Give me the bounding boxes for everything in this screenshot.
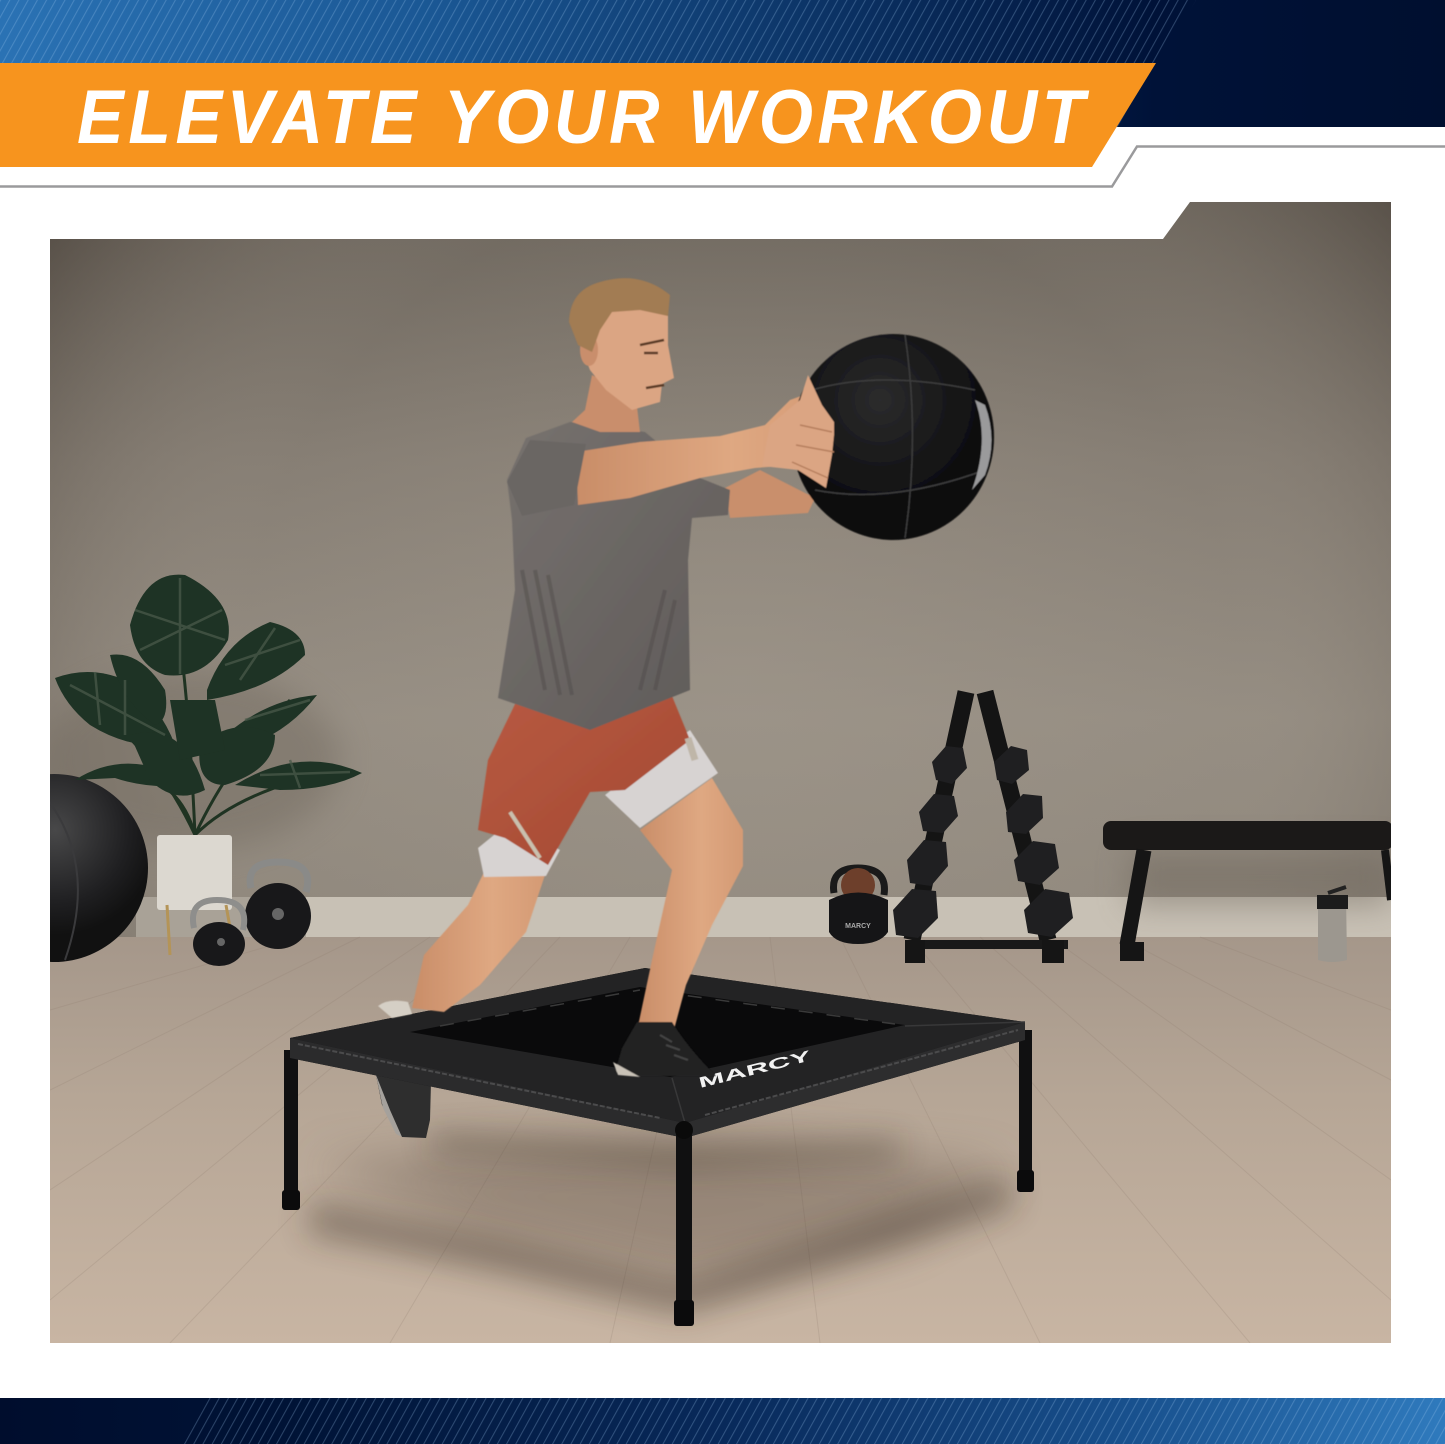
bottom band	[0, 1398, 1445, 1444]
red shorts	[478, 696, 695, 865]
front shoe	[613, 1022, 716, 1077]
hair	[569, 278, 670, 352]
hand fingers	[762, 375, 834, 488]
photo scene	[0, 202, 1393, 1343]
sleeve	[507, 440, 586, 516]
face features	[640, 340, 664, 388]
back leg	[412, 868, 546, 1012]
medicine ball	[792, 334, 994, 540]
potted plant	[55, 575, 362, 955]
exercise ball	[50, 774, 148, 962]
neck	[572, 375, 640, 432]
front arm	[576, 396, 800, 506]
header ribbon with title: ELEVATE YOUR WORKOUT	[77, 75, 1090, 160]
wood floor	[50, 937, 1391, 1343]
person	[378, 278, 994, 1077]
top banner background	[0, 0, 1445, 127]
ear	[580, 334, 598, 366]
trampoline back legs and deck	[282, 968, 1034, 1326]
header rule line	[0, 146, 1445, 186]
front leg	[638, 778, 743, 1026]
trampoline floor shadow	[310, 1135, 1010, 1298]
white compression shorts	[478, 730, 718, 877]
bench	[1103, 821, 1393, 961]
wall	[40, 202, 1391, 942]
back arm	[725, 470, 815, 518]
back shoe upper	[378, 1001, 412, 1018]
shaker bottle	[1317, 887, 1348, 962]
kettlebell right: MARCY	[845, 923, 871, 930]
kettlebells left	[193, 862, 311, 966]
head	[580, 303, 674, 410]
grey shirt	[498, 422, 730, 730]
kettlebell right	[829, 868, 888, 944]
logo: MARCY: MARCY	[697, 1048, 813, 1092]
dumbbell rack	[893, 692, 1073, 963]
back shoe lower	[376, 1075, 431, 1138]
